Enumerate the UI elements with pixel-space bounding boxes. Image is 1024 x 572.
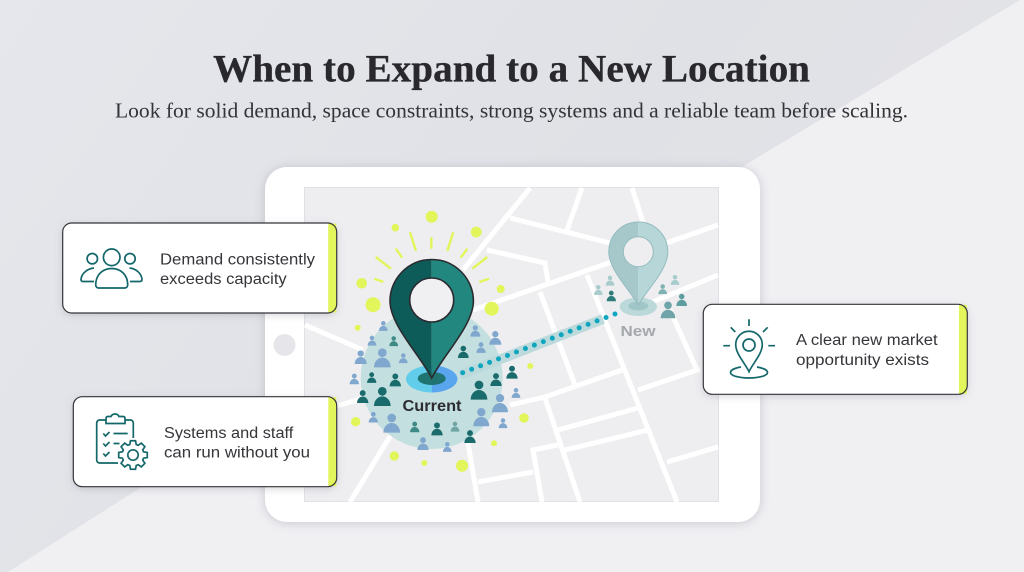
roads <box>304 188 718 502</box>
label: new: New <box>620 323 656 340</box>
card text: Systems and staff <box>164 425 294 442</box>
card: systems and staff <box>73 397 337 487</box>
icon: clipboard and gear <box>97 414 147 469</box>
card text: can run without you <box>164 445 310 462</box>
label: current: Current <box>402 398 462 415</box>
card text: A clear new market <box>796 332 938 349</box>
icon: people <box>81 249 142 288</box>
crowd around new location <box>594 275 687 318</box>
subtitle: Look for solid demand, space constraints, strong systems and a reliable team before scaling. <box>115 98 908 122</box>
map screen <box>304 188 718 502</box>
new location pin <box>609 222 668 305</box>
card text: exceeds capacity <box>160 271 287 288</box>
route to new location <box>460 314 615 375</box>
crowd around current location <box>350 321 520 452</box>
card text: opportunity exists <box>796 352 929 369</box>
current location base <box>406 366 457 392</box>
home button <box>274 334 296 356</box>
icon: location idea <box>723 319 775 378</box>
tablet <box>265 167 760 522</box>
current location pin <box>390 260 473 378</box>
card: new market opportunity <box>703 304 967 394</box>
card: demand exceeds capacity <box>63 223 337 313</box>
yellow dots and rays <box>351 211 533 472</box>
card text <box>160 252 315 288</box>
card text: Demand consistently <box>160 252 315 268</box>
title: When to Expand to a New Location <box>213 48 810 90</box>
new location base <box>620 297 657 316</box>
card text <box>164 425 310 462</box>
card text <box>796 332 938 369</box>
demand area circle <box>361 307 503 449</box>
